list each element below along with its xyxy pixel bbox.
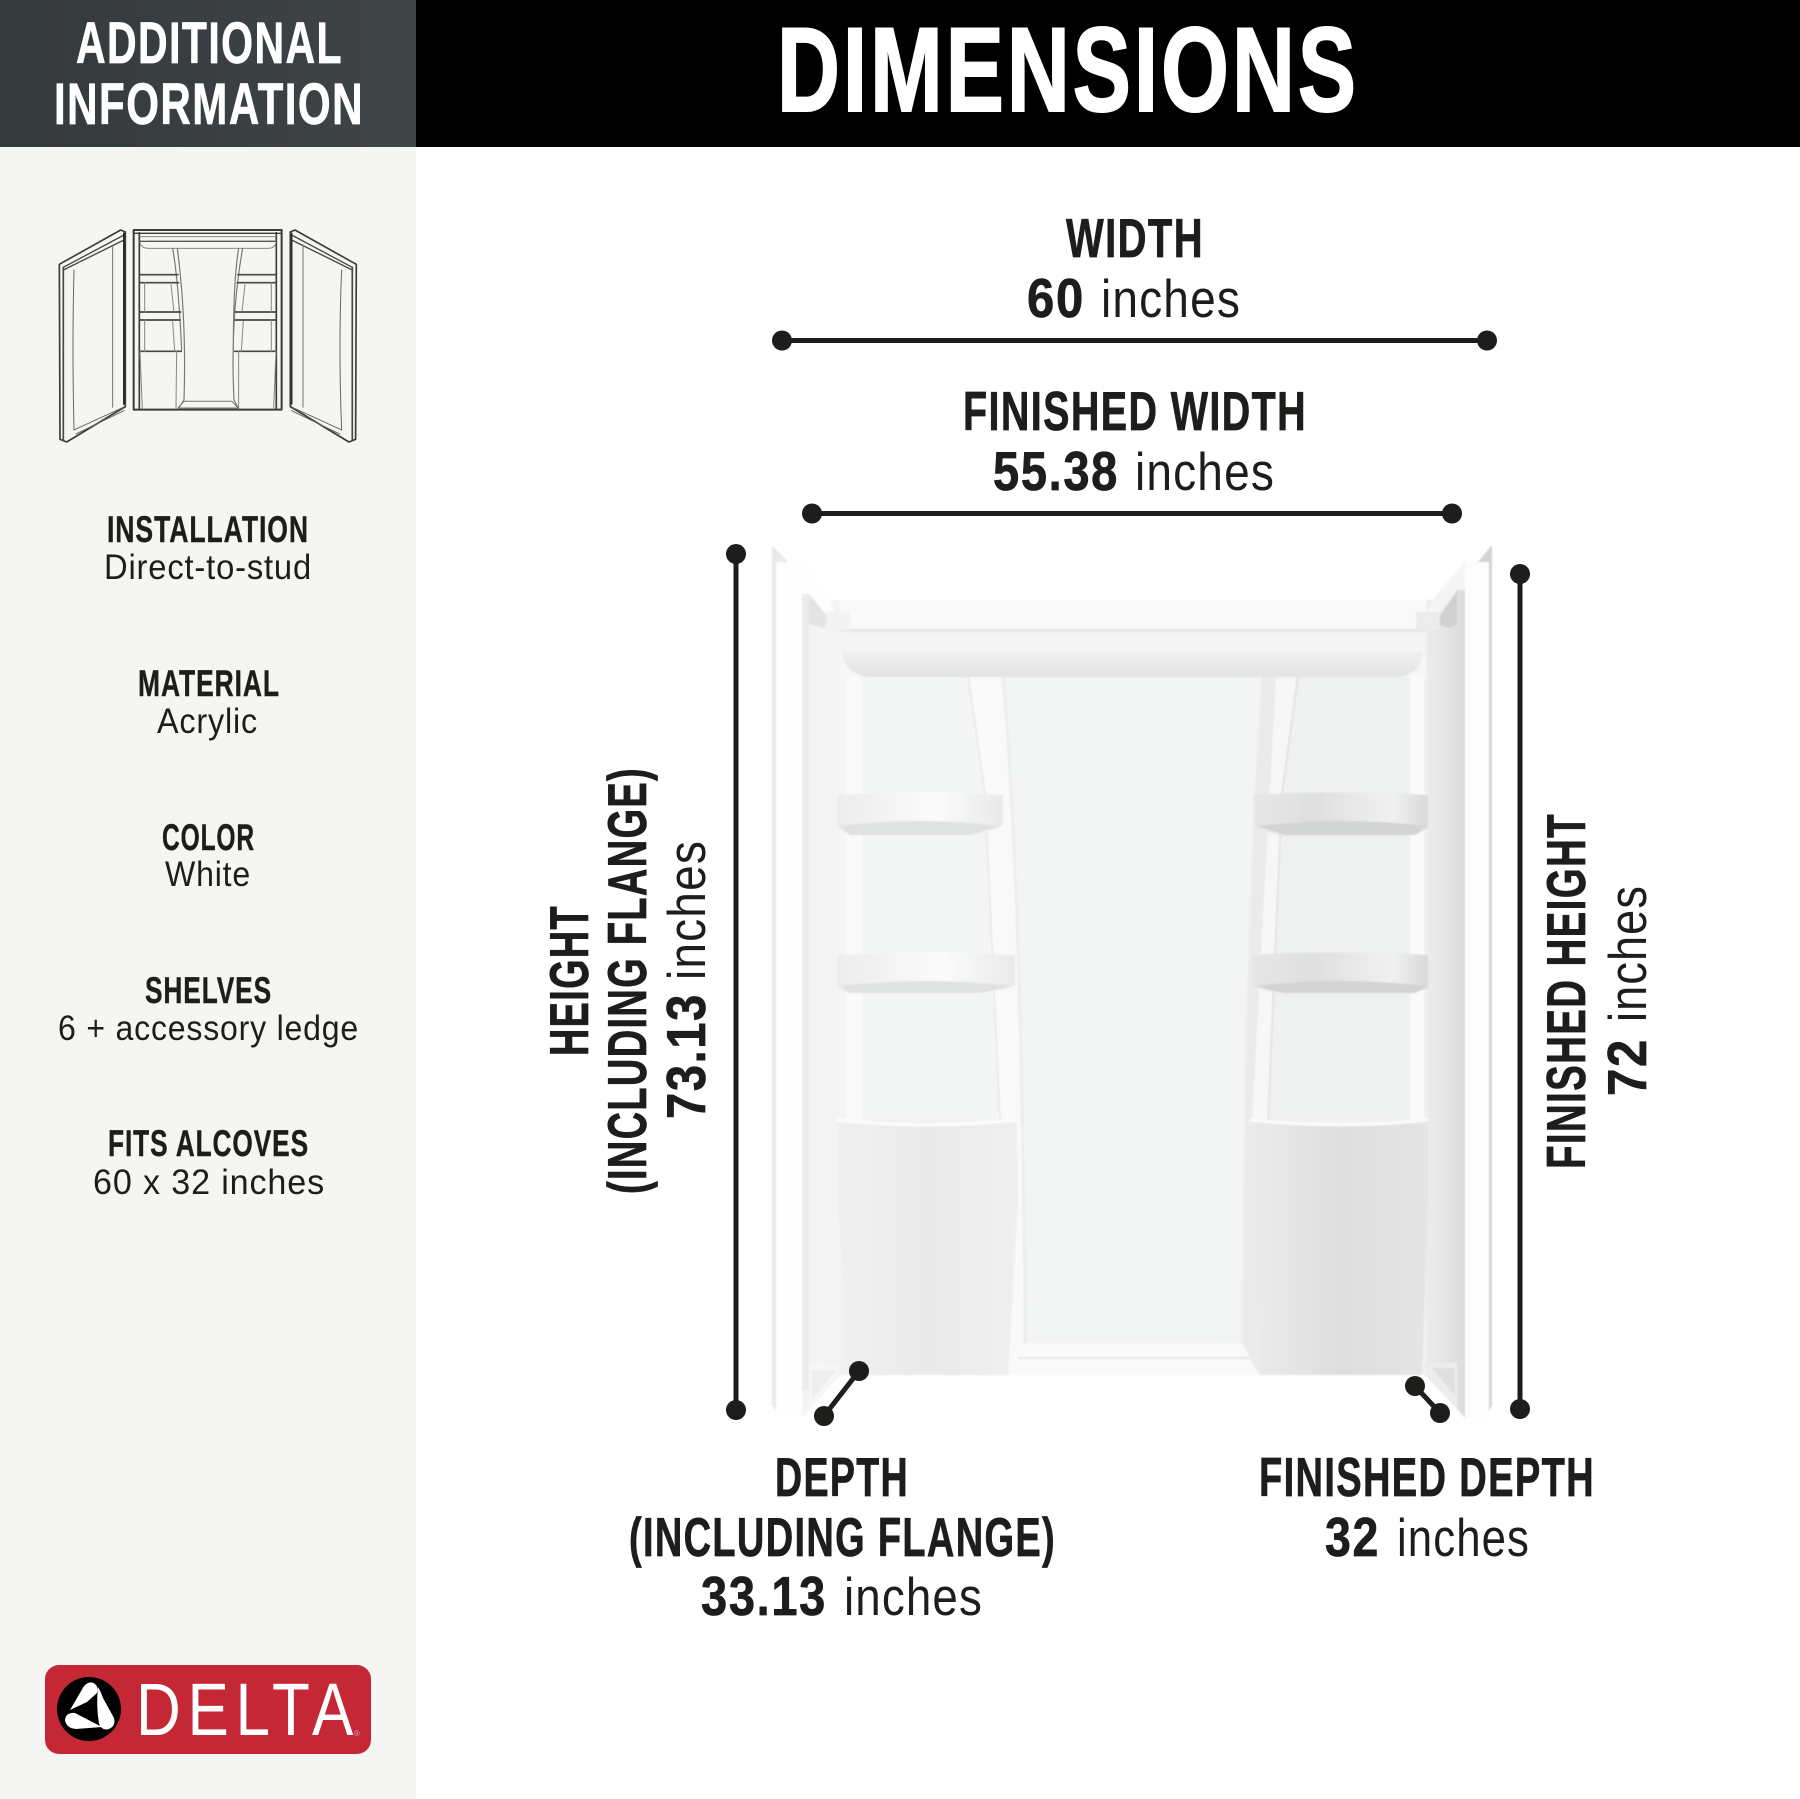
center panel (1002, 677, 1262, 1375)
label: finished width (963, 380, 1307, 502)
spec: color: White (165, 855, 251, 894)
spec: installation (104, 509, 312, 587)
back wall (838, 600, 1430, 1375)
center panel drawing (134, 230, 282, 410)
label: depth including flange: 33.13 (701, 1565, 827, 1627)
label: width: 60 (1027, 267, 1085, 329)
logo: Delta (45, 1665, 371, 1754)
right strut (1252, 677, 1296, 1120)
dimension line: finished height (1510, 564, 1530, 1419)
spec: shelves: 6 + accessory ledge (58, 1009, 359, 1048)
header: additional information (0, 0, 416, 147)
spec: fits alcoves (93, 1123, 325, 1202)
left return wall (802, 562, 840, 1418)
label: finished width: inches (1135, 443, 1275, 502)
spec: material: MATERIAL (138, 663, 280, 704)
left corner seat (837, 1122, 1018, 1375)
label: finished height: 72 (1596, 1038, 1658, 1096)
left strut (970, 677, 1016, 1120)
label: depth including flange: (INCLUDING FLANGE) (629, 1506, 1056, 1568)
shower wall product image (772, 545, 1492, 1418)
spec: shelves (58, 970, 359, 1048)
label: height including flange: inches (658, 840, 717, 980)
dimension line: width (772, 330, 1497, 350)
dimension line: depth (814, 1361, 869, 1426)
label: finished height: inches (1599, 885, 1658, 1022)
label: finished height (1535, 813, 1658, 1169)
label: depth including flange: DEPTH (775, 1446, 909, 1508)
label: width: inches (1101, 270, 1241, 329)
left alcove column (840, 677, 1000, 1120)
header: dimensions title: DIMENSIONS (777, 3, 1359, 137)
right diagonal top wedge (1426, 562, 1465, 624)
left diagonal bottom wedge (802, 1364, 838, 1418)
label: depth including flange (629, 1446, 1056, 1627)
logo: Delta: DELTA (136, 1668, 360, 1751)
spec: material: Acrylic (157, 702, 258, 741)
label: finished width: FINISHED WIDTH (963, 380, 1307, 442)
header: dimensions title (416, 0, 1800, 147)
header: additional information: INFORMATION (54, 72, 364, 137)
right corner seat (1250, 1122, 1428, 1375)
label: width (1027, 207, 1241, 329)
sidebar panel background (0, 147, 416, 1799)
top band (830, 600, 1432, 630)
spec: shelves: SHELVES (145, 970, 272, 1011)
left lower shelf (837, 952, 1015, 993)
side rails (846, 677, 1424, 1120)
label: finished depth: inches (1397, 1509, 1530, 1568)
dimension line: finished width (802, 504, 1462, 524)
right diagonal bottom wedge (1425, 1362, 1465, 1418)
bottom trim (1008, 1343, 1259, 1375)
label: width: WIDTH (1066, 207, 1204, 269)
spec: fits alcoves: FITS ALCOVES (108, 1123, 309, 1164)
label: height including flange: HEIGHT (538, 905, 600, 1056)
label: depth including flange: inches (844, 1568, 983, 1627)
left panel drawing (59, 230, 125, 442)
spec: installation: Direct-to-stud (104, 548, 312, 587)
dimension line: height (726, 544, 746, 1420)
label: height including flange: 73.13 (655, 993, 717, 1119)
ledge (842, 652, 1423, 677)
spec: color: COLOR (162, 817, 255, 858)
right alcove column (1265, 677, 1428, 1120)
label: finished depth: FINISHED DEPTH (1259, 1446, 1595, 1508)
icon: line drawing of three wall panels (59, 230, 356, 442)
header: additional information: ADDITIONAL (76, 11, 343, 76)
label: finished width: 55.38 (993, 440, 1119, 502)
right lower shelf (1252, 952, 1428, 993)
dimension line: finished depth (1405, 1376, 1450, 1423)
right panel drawing (290, 230, 356, 442)
spec: installation: INSTALLATION (107, 509, 309, 550)
label: height including flange (538, 767, 717, 1194)
left diagonal top wedge (802, 562, 836, 622)
right flange (1465, 545, 1492, 1418)
spec: material (138, 663, 280, 741)
label: finished depth (1259, 1446, 1595, 1568)
logo: Delta: ® (354, 1729, 360, 1738)
spec: color (162, 817, 255, 894)
right return wall (1426, 562, 1465, 1418)
spec: fits alcoves: 60 x 32 inches (93, 1163, 325, 1202)
right upper shelf (1254, 792, 1428, 835)
label: finished depth: 32 (1325, 1506, 1380, 1568)
label: height including flange: (INCLUDING FLANGE) (596, 767, 658, 1194)
left flange (772, 545, 802, 1418)
label: finished height: FINISHED HEIGHT (1535, 813, 1597, 1169)
left upper shelf (837, 792, 1003, 835)
